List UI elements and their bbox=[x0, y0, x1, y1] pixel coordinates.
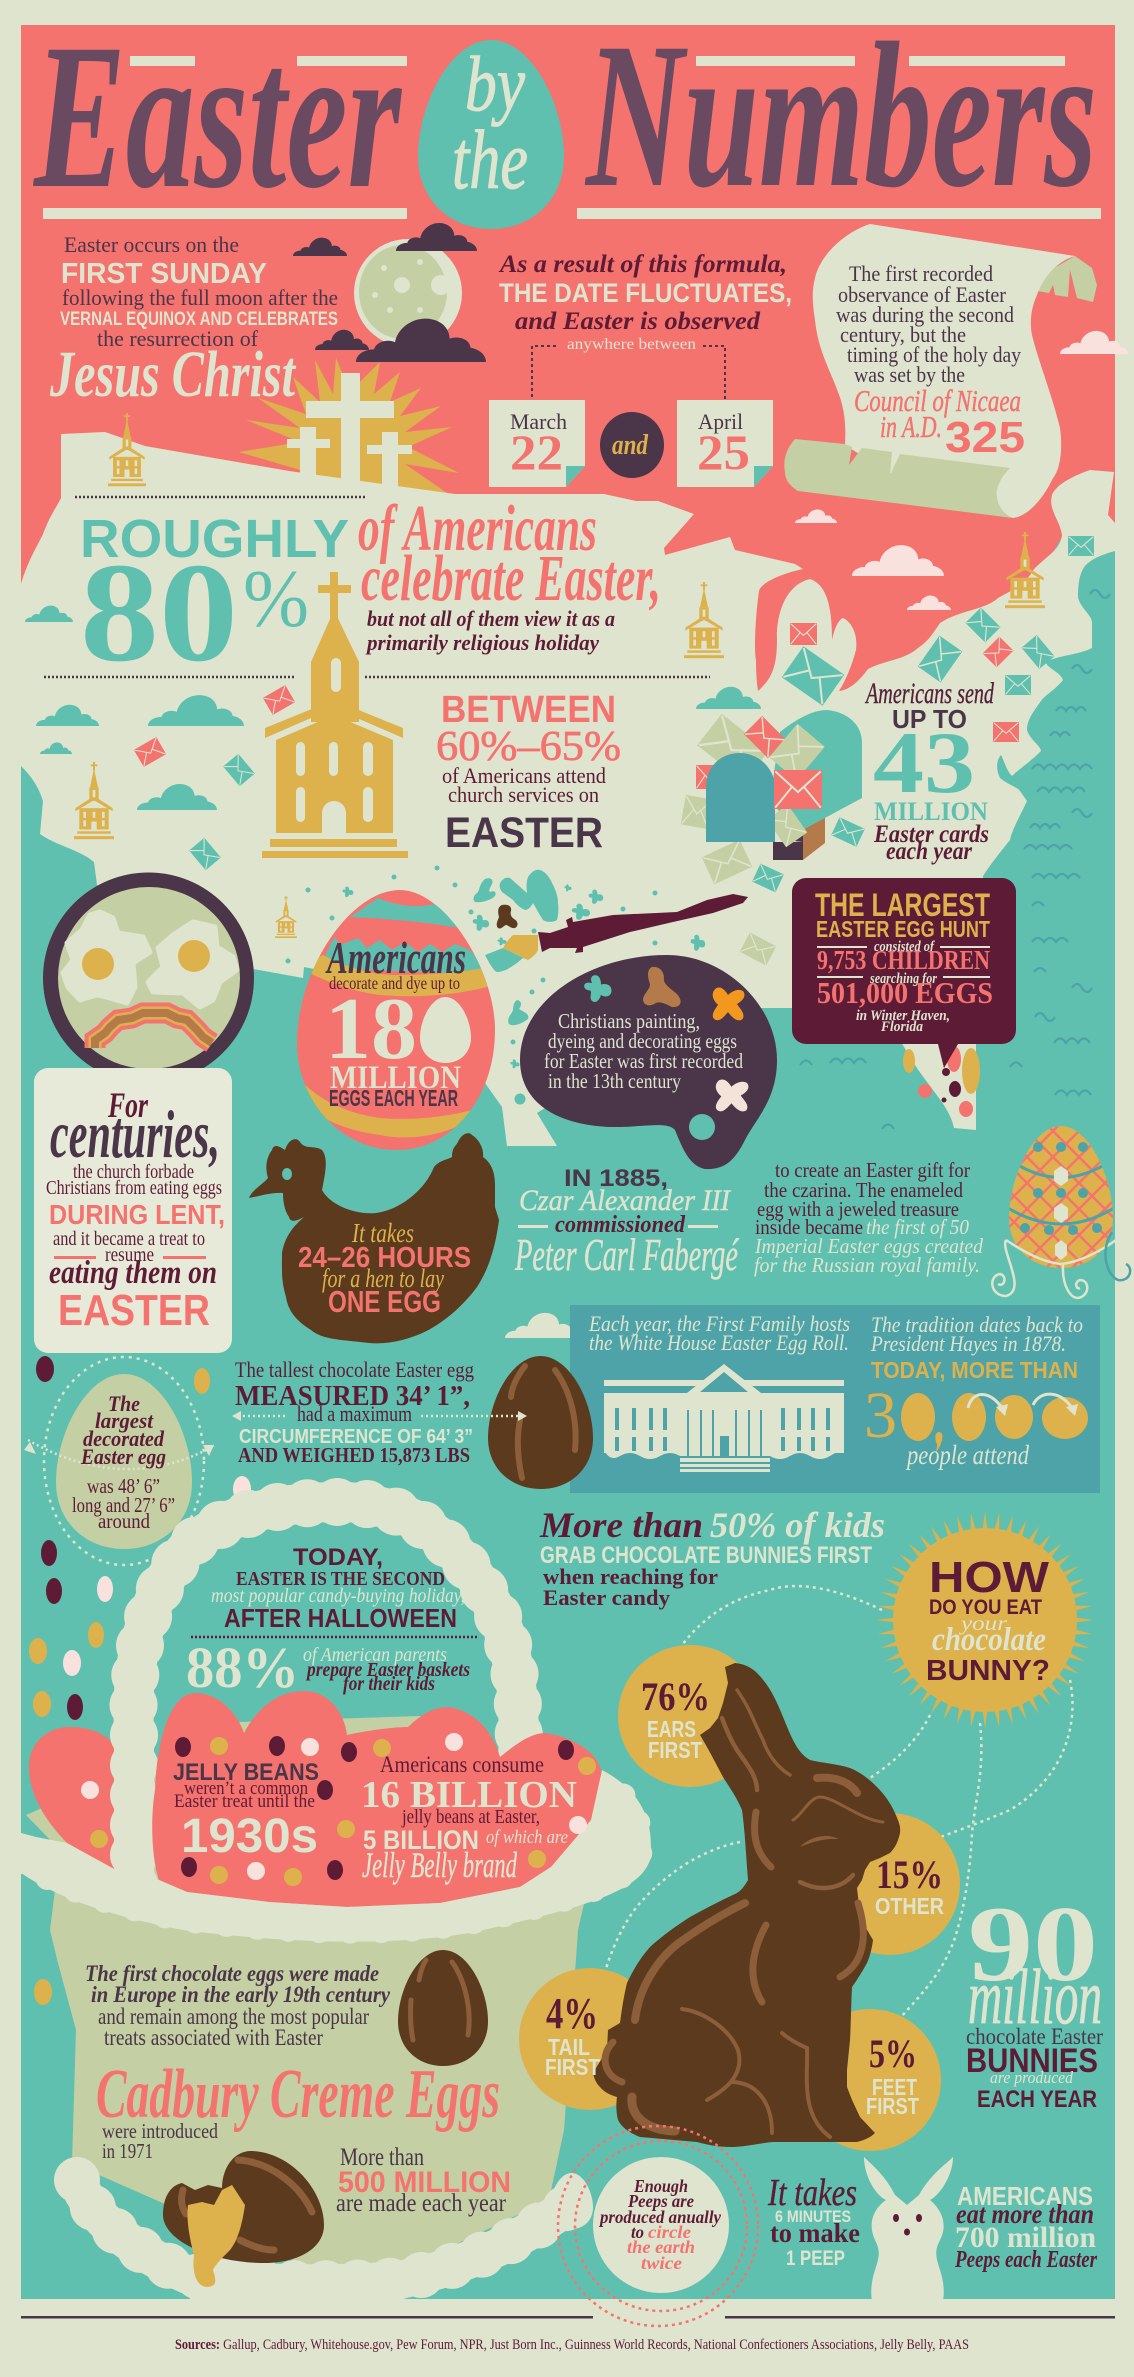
sources: Sources: Gallup, Cadbury, Whitehouse.gov, Pew Forum, NPR, Just Born Inc., Guinness World Records, National Confectioners Associations, Jelly Belly, PAAS bbox=[175, 2337, 969, 2353]
panel: for centuries: and it became a treat to bbox=[53, 1228, 205, 1250]
text block: chocolate eggs in basket: The first chocolate eggs were made bbox=[85, 1961, 379, 1986]
text block: church attendance bbox=[436, 689, 621, 857]
jelly beans scattered left bbox=[29, 1356, 251, 2005]
coral jelly eggs bbox=[152, 1691, 602, 1907]
date card March 22: 22 bbox=[510, 424, 563, 480]
panel: largest Easter egg hunt: Florida bbox=[880, 1019, 923, 1035]
map of the United States: land bbox=[21, 432, 1115, 1146]
footer rule bbox=[21, 2316, 1115, 2318]
text block: Easter cards: each year bbox=[886, 838, 972, 865]
text block: Cadbury bbox=[96, 2056, 511, 2217]
panel: largest Easter egg hunt: searching for bbox=[869, 971, 937, 987]
date card April 25: April bbox=[698, 409, 743, 434]
text block: candy holiday bbox=[186, 1544, 477, 1700]
starburst: how do you eat your chocolate bunny: DO YOU EAT bbox=[929, 1596, 1042, 1619]
icon: largest decorated egg: around bbox=[98, 1509, 150, 1533]
arrowheads: circumference bbox=[232, 1411, 527, 1421]
text block: Faberge: for the Russian royal family. bbox=[754, 1253, 980, 1277]
text block: date of Easter: VERNAL EQUINOX AND CELEBRATES bbox=[60, 309, 338, 330]
text block: candy holiday: EASTER IS THE SECOND bbox=[236, 1568, 445, 1590]
icon: largest decorated egg bbox=[24, 1357, 214, 1565]
hill crosses bbox=[287, 373, 412, 494]
title word Easter: Easter bbox=[33, 1, 402, 231]
text block: chocolate bunnies bbox=[539, 1505, 885, 1610]
labels on bunny circles: FEET bbox=[872, 2074, 917, 2100]
icon: chocolate bunny bbox=[593, 1663, 900, 2147]
starburst: how do you eat your chocolate bunny: HOW bbox=[929, 1553, 1050, 1602]
text block: peep time: to make bbox=[770, 2218, 860, 2248]
text block: church attendance: EASTER bbox=[445, 809, 603, 857]
text block: Faberge: inside became bbox=[755, 1215, 863, 1239]
panel: for centuries: centuries, bbox=[50, 1096, 220, 1172]
panel: for centuries: resume bbox=[105, 1244, 154, 1266]
date card April 25 bbox=[677, 400, 773, 487]
panel: ocean teal bbox=[21, 480, 1115, 2299]
starburst: how do you eat your chocolate bunny: BUNNY? bbox=[926, 1655, 1050, 1687]
small churches bbox=[74, 413, 1045, 938]
envelopes bbox=[134, 536, 1094, 966]
florida with eggs bbox=[903, 1046, 980, 1117]
icon: largest decorated egg: decorated bbox=[83, 1426, 165, 1451]
scroll: Council of Nicaea: was during the second bbox=[836, 302, 1014, 327]
text block: formula: THE DATE FLUCTUATES, bbox=[499, 278, 792, 308]
text block: date of Easter: Easter occurs on the bbox=[64, 232, 239, 257]
circle: other bbox=[820, 1813, 960, 1955]
text block: Easter cards: MILLION bbox=[874, 797, 988, 826]
text block: formula: As a result of this formula, bbox=[498, 251, 787, 278]
big Easter egg: MILLION bbox=[330, 1060, 461, 1096]
starburst: how do you eat your chocolate bunny bbox=[876, 1511, 1094, 1729]
text block: candy holiday: for their kids bbox=[343, 1673, 435, 1695]
icon: big church bbox=[262, 572, 408, 858]
text block: chocolate bunnies: when reaching for bbox=[543, 1564, 718, 1589]
text block: 90 million: 90 bbox=[968, 1885, 1098, 2004]
text block: chocolate bunnies: GRAB CHOCOLATE BUNNIES FIRST bbox=[540, 1542, 872, 1569]
scroll: Council of Nicaea: was set by the bbox=[854, 362, 965, 387]
labels on bunny circles: OTHER bbox=[875, 1893, 944, 1919]
starburst: how do you eat your chocolate bunny: chocolate bbox=[932, 1622, 1046, 1658]
title egg with by the: by bbox=[465, 40, 525, 127]
text block: tallest chocolate egg: had a maximum bbox=[297, 1401, 412, 1426]
panel: White House: President Hayes in 1878. bbox=[870, 1331, 1066, 1356]
text block: date of Easter: the resurrection of bbox=[97, 326, 259, 351]
title bbox=[33, 0, 1101, 231]
icon: hen: ONE EGG bbox=[328, 1284, 441, 1319]
icon: Peep egg with circling dashed rings: circle bbox=[648, 2222, 691, 2242]
text block: church attendance: of Americans attend bbox=[442, 763, 606, 788]
palette bbox=[520, 955, 777, 1169]
text block: jelly beans: 5 BILLION bbox=[363, 1825, 479, 1855]
30,000 eggs bbox=[864, 1379, 1088, 1452]
panel: White House: people attend bbox=[905, 1440, 1029, 1470]
text block: candy holiday: 88% bbox=[186, 1635, 299, 1700]
text block: chocolate bunnies: More than bbox=[539, 1505, 703, 1545]
icon: Faberge egg bbox=[992, 1120, 1130, 1298]
text block: Easter cards: 43 bbox=[873, 715, 975, 812]
panel: White House bbox=[570, 1305, 1100, 1493]
scroll: Council of Nicaea: Council of Nicaea bbox=[854, 383, 1021, 418]
scroll: Council of Nicaea: century, but the bbox=[840, 322, 966, 347]
scroll: Council of Nicaea: observance of Easter bbox=[838, 282, 1007, 307]
big Easter egg: decorate and dye up to bbox=[329, 973, 460, 993]
panel: largest Easter egg hunt: 501,000 EGGS bbox=[817, 975, 993, 1010]
panel: for centuries bbox=[34, 1068, 232, 1353]
30,000 eggs: 3 bbox=[864, 1379, 897, 1452]
basket bbox=[21, 1502, 651, 2302]
text block: Faberge: commissioned bbox=[555, 1212, 686, 1238]
fried egg left bbox=[63, 912, 150, 1003]
icon: chocolate egg in basket bbox=[398, 1950, 488, 2066]
text block: chocolate eggs in basket: treats associated with Easter bbox=[104, 2025, 323, 2050]
scroll: Council of Nicaea: The first recorded bbox=[849, 261, 993, 286]
jelly beans on eggs bbox=[81, 1733, 596, 1886]
text block: 90 million: chocolate Easter bbox=[966, 2024, 1103, 2049]
arrowheads on dashed paths bbox=[595, 1656, 932, 2032]
text block: jelly beans bbox=[173, 1752, 577, 1885]
text block: tallest chocolate egg bbox=[235, 1357, 474, 1467]
panel: for centuries: eating them on bbox=[49, 1255, 217, 1291]
icon: mailbox with envelopes bbox=[681, 710, 862, 860]
text block: jelly beans: of which are bbox=[486, 1827, 568, 1848]
text block: Easter cards bbox=[865, 677, 995, 865]
text block: chocolate eggs in basket bbox=[85, 1961, 391, 2050]
text block: peep time: It takes bbox=[767, 2172, 857, 2214]
text block: Cadbury: are made each year bbox=[336, 2190, 507, 2217]
labels on bunny circles: 4% bbox=[546, 1989, 598, 2038]
panel: largest Easter egg hunt: EASTER EGG HUNT bbox=[816, 916, 990, 942]
left jelly egg bbox=[29, 1727, 120, 1875]
icon: White House bbox=[604, 1364, 844, 1472]
big Easter egg: 18 bbox=[325, 981, 417, 1078]
icon: Peep egg with circling dashed rings: twice bbox=[641, 2253, 682, 2273]
icon: hen bbox=[249, 1133, 499, 1343]
icon: Peep egg with circling dashed rings: the earth bbox=[627, 2237, 695, 2257]
text block: Faberge: Imperial Easter eggs created bbox=[754, 1234, 983, 1258]
big Easter egg: EGGS EACH YEAR bbox=[329, 1085, 458, 1111]
panel: coral sky bbox=[21, 25, 1115, 705]
arrowheads bbox=[528, 403, 729, 410]
panel: White House: the White House Easter Egg Roll. bbox=[589, 1330, 849, 1355]
icon: tallest chocolate egg bbox=[488, 1356, 593, 1489]
text block: Faberge: to create an Easter gift for bbox=[775, 1158, 970, 1182]
text block: roughly 80% bbox=[80, 492, 661, 691]
panel: White House: The tradition dates back to bbox=[871, 1312, 1083, 1337]
text block: chocolate eggs in basket: in Europe in the early 19th century bbox=[91, 1982, 391, 2007]
text block: Faberge: the czarina. The enameled bbox=[764, 1178, 963, 1202]
text block: jelly beans: Easter treat until the bbox=[174, 1791, 315, 1812]
text block: 90 million: EACH YEAR bbox=[977, 2086, 1097, 2113]
text block: Peeps eaten: 700 million bbox=[955, 2221, 1096, 2254]
icon: hen: 24–26 HOURS bbox=[298, 1242, 471, 1274]
text block: jelly beans: 16 BILLION bbox=[361, 1774, 577, 1816]
labels on bunny circles: 15% bbox=[876, 1852, 943, 1897]
labels on bunny circles: TAIL bbox=[548, 2034, 590, 2060]
labels on bunny circles bbox=[545, 1852, 944, 2119]
palette: dyeing and decorating eggs bbox=[548, 1029, 737, 1053]
text block: jelly beans: Jelly Belly brand bbox=[362, 1845, 518, 1885]
text block: peep time: 1 PEEP bbox=[786, 2247, 845, 2270]
icon: Peep egg with circling dashed rings bbox=[558, 2126, 758, 2326]
text block: Faberge: Peter Carl Fabergé bbox=[514, 1229, 740, 1280]
and circle: and bbox=[612, 430, 649, 461]
basket bottom rim bbox=[77, 2180, 570, 2283]
pink clouds bbox=[795, 331, 1128, 610]
title egg with by the: the bbox=[452, 114, 528, 207]
panel: largest Easter egg hunt: consisted of bbox=[874, 939, 936, 955]
icon: hen: It takes bbox=[351, 1218, 414, 1248]
text block: 90 million bbox=[966, 1885, 1103, 2113]
text block: formula bbox=[498, 251, 792, 353]
moon with clouds bbox=[293, 223, 486, 362]
text block: Cadbury: Cadbury Creme Eggs bbox=[96, 2056, 500, 2133]
text block: Cadbury: 500 MILLION bbox=[338, 2166, 511, 2199]
arrow: circumference bbox=[238, 1415, 522, 1417]
basket body bbox=[26, 1716, 600, 2290]
date card March 22: March bbox=[510, 409, 567, 434]
text block: Cadbury: were introduced bbox=[102, 2119, 218, 2143]
circle: ears first: EARS bbox=[647, 1716, 696, 1742]
small cream egg on rim bbox=[550, 2173, 593, 2229]
text block: church attendance: 60%–65% bbox=[436, 724, 621, 770]
text block: date of Easter: FIRST SUNDAY bbox=[61, 258, 267, 290]
fried egg right bbox=[148, 922, 237, 1007]
text block: roughly 80%: 80 bbox=[80, 533, 238, 691]
panel: largest Easter egg hunt bbox=[792, 878, 1016, 1068]
scroll: Council of Nicaea bbox=[784, 224, 1097, 518]
icon: largest decorated egg: long and 27’ 6” bbox=[72, 1493, 175, 1517]
text block: church attendance: church services on bbox=[448, 782, 599, 807]
text block: peep time: 6 MINUTES bbox=[775, 2207, 851, 2226]
arrows to dates bbox=[532, 346, 725, 405]
text block: tallest chocolate egg: AND WEIGHED 15,873 LBS bbox=[238, 1443, 470, 1467]
sun rays behind crosses bbox=[239, 358, 459, 495]
cloud over white house bbox=[505, 1313, 580, 1338]
text block: formula: and Easter is observed bbox=[515, 308, 761, 335]
text block: date of Easter: Jesus Christ bbox=[49, 338, 296, 411]
text block: Peeps eaten: eat more than bbox=[956, 2199, 1094, 2229]
panel: largest Easter egg hunt: in Winter Haven, bbox=[856, 1008, 950, 1024]
text block: roughly 80%: of Americans bbox=[358, 492, 597, 565]
labels on bunny circles: FIRST bbox=[866, 2093, 919, 2119]
text block: jelly beans: JELLY BEANS bbox=[173, 1759, 319, 1786]
text block: Faberge bbox=[514, 1158, 983, 1280]
icon: largest decorated egg: was 48’ 6” bbox=[87, 1474, 160, 1498]
panel: for centuries: For bbox=[107, 1085, 149, 1125]
icon: Peep egg with circling dashed rings: Enough bbox=[633, 2176, 688, 2196]
palette: in the 13th century bbox=[548, 1069, 681, 1093]
text block: Easter cards: Americans send bbox=[865, 677, 995, 710]
text block: date of Easter bbox=[49, 232, 338, 411]
text block: tallest chocolate egg: CIRCUMFERENCE OF 64’ 3” bbox=[239, 1426, 473, 1448]
waves in the ocean bbox=[800, 590, 1110, 1129]
text block: church attendance: BETWEEN bbox=[441, 689, 616, 731]
teal clouds bbox=[25, 606, 761, 810]
icon: frying pan with eggs and bacon bbox=[43, 872, 254, 1084]
text block: Cadbury: More than bbox=[340, 2144, 424, 2171]
big Easter egg bbox=[295, 888, 497, 1152]
bacon bbox=[95, 1013, 212, 1048]
circle: ears first: FIRST bbox=[648, 1737, 702, 1763]
text block: Peeps eaten bbox=[954, 2181, 1098, 2273]
text block: chocolate bunnies: Easter candy bbox=[543, 1585, 670, 1610]
text block: Peeps eaten: AMERICANS bbox=[957, 2181, 1093, 2211]
circle: ears first bbox=[618, 1645, 762, 1787]
text block: 90 million: are produced bbox=[990, 2068, 1073, 2087]
text block: roughly 80%: celebrate Easter, bbox=[361, 542, 661, 615]
dividers bbox=[44, 497, 710, 677]
basket handle bbox=[133, 1502, 519, 1885]
text block: Faberge: IN 1885, bbox=[564, 1165, 668, 1192]
text block: tallest chocolate egg: The tallest chocolate Easter egg bbox=[235, 1357, 474, 1382]
and circle bbox=[600, 412, 664, 478]
text block: jelly beans: jelly beans at Easter, bbox=[401, 1806, 540, 1828]
labels on bunny circles: 5% bbox=[869, 2031, 917, 2076]
circle: feet first bbox=[799, 2009, 941, 2151]
panel: Atlantic teal bbox=[1000, 523, 1115, 710]
icon: largest decorated egg: largest bbox=[95, 1408, 154, 1433]
starburst: how do you eat your chocolate bunny: your bbox=[958, 1613, 1007, 1635]
text block: candy holiday: prepare Easter baskets bbox=[305, 1659, 470, 1681]
text block: roughly 80%: % bbox=[243, 553, 309, 644]
text block: candy holiday: AFTER HALLOWEEN bbox=[224, 1603, 457, 1633]
basket top rim bbox=[21, 1770, 651, 1942]
text block: 90 million: BUNNIES bbox=[966, 2042, 1098, 2080]
panel: for centuries: the church forbade bbox=[73, 1161, 194, 1183]
text block: Easter cards: Easter cards bbox=[873, 821, 989, 848]
panel: for centuries: Christians from eating eggs bbox=[46, 1177, 222, 1199]
big Easter egg: Americans bbox=[325, 932, 466, 983]
text block: Faberge: egg with a jeweled treasure bbox=[757, 1197, 959, 1221]
text block: tallest chocolate egg: MEASURED 34’ 1”, bbox=[235, 1381, 470, 1412]
icon: broken Cadbury egg bbox=[163, 2151, 324, 2287]
text block: date of Easter: following the full moon after the bbox=[62, 285, 338, 310]
icon: largest decorated egg: The bbox=[108, 1391, 140, 1416]
text block: roughly 80%: but not all of them view it as a bbox=[367, 606, 615, 631]
text block: peep time bbox=[767, 2172, 860, 2270]
text block: candy holiday: TODAY, bbox=[293, 1544, 383, 1571]
text block: roughly 80%: ROUGHLY bbox=[80, 509, 349, 569]
icon: Peep egg with circling dashed rings: to bbox=[631, 2222, 644, 2242]
text block: candy holiday: of American parents bbox=[303, 1644, 447, 1666]
scroll: Council of Nicaea: timing of the holy day bbox=[847, 342, 1021, 367]
text block: roughly 80%: primarily religious holiday bbox=[365, 630, 599, 655]
date card April 25: 25 bbox=[697, 424, 750, 480]
panel: for centuries: EASTER bbox=[58, 1286, 210, 1335]
dashed paths from the starburst bbox=[602, 1586, 1072, 2028]
circle: tail first bbox=[519, 1968, 661, 2110]
icon: Peep bunny bbox=[864, 2157, 953, 2310]
palette: for Easter was first recorded bbox=[544, 1049, 743, 1073]
icon: paintbrush bbox=[485, 894, 748, 972]
palette: Christians painting, bbox=[558, 1009, 700, 1033]
title decorative bars bbox=[43, 56, 1101, 219]
panel: White House: Each year, the First Family hosts bbox=[588, 1311, 850, 1336]
text block: Cadbury: in 1971 bbox=[102, 2139, 153, 2163]
icon: hen: for a hen to lay bbox=[322, 1264, 444, 1293]
text block: candy holiday: most popular candy-buying holiday, bbox=[211, 1585, 465, 1607]
labels on bunny circles: FIRST bbox=[545, 2054, 600, 2080]
text block: chocolate eggs in basket: and remain among the most popular bbox=[98, 2004, 369, 2029]
text block: jelly beans: Americans consume bbox=[380, 1752, 544, 1777]
panel: White House: TODAY, MORE THAN bbox=[871, 1357, 1078, 1383]
icon: Peep egg with circling dashed rings: Peeps are bbox=[627, 2191, 694, 2211]
panel: largest Easter egg hunt: 9,753 CHILDREN bbox=[817, 945, 990, 975]
date card March 22 bbox=[489, 400, 585, 487]
text block: jelly beans: weren’t a common bbox=[184, 1778, 308, 1799]
text block: formula: anywhere between bbox=[567, 336, 696, 353]
icon: Peep egg with circling dashed rings: produced anually bbox=[598, 2207, 722, 2227]
text block: Faberge: the first of 50 bbox=[866, 1215, 969, 1239]
paint splashes bbox=[286, 866, 705, 1104]
text block: chocolate bunnies: 50% of kids bbox=[710, 1505, 885, 1545]
scroll: Council of Nicaea: 325 bbox=[945, 413, 1025, 462]
circle: ears first: 76% bbox=[641, 1674, 710, 1719]
icon: largest decorated egg: Easter egg bbox=[80, 1444, 166, 1469]
text block: Peeps eaten: Peeps each Easter bbox=[954, 2247, 1098, 2273]
text block: Faberge: Czar Alexander III bbox=[519, 1184, 732, 1217]
scroll: Council of Nicaea: in A.D. bbox=[880, 409, 942, 444]
panel: for centuries: DURING LENT, bbox=[49, 1199, 225, 1230]
title egg with by the bbox=[418, 40, 564, 229]
panel: largest Easter egg hunt: THE LARGEST bbox=[815, 887, 990, 923]
text block: Easter cards: UP TO bbox=[892, 704, 967, 734]
text block: jelly beans: 1930s bbox=[181, 1810, 318, 1863]
